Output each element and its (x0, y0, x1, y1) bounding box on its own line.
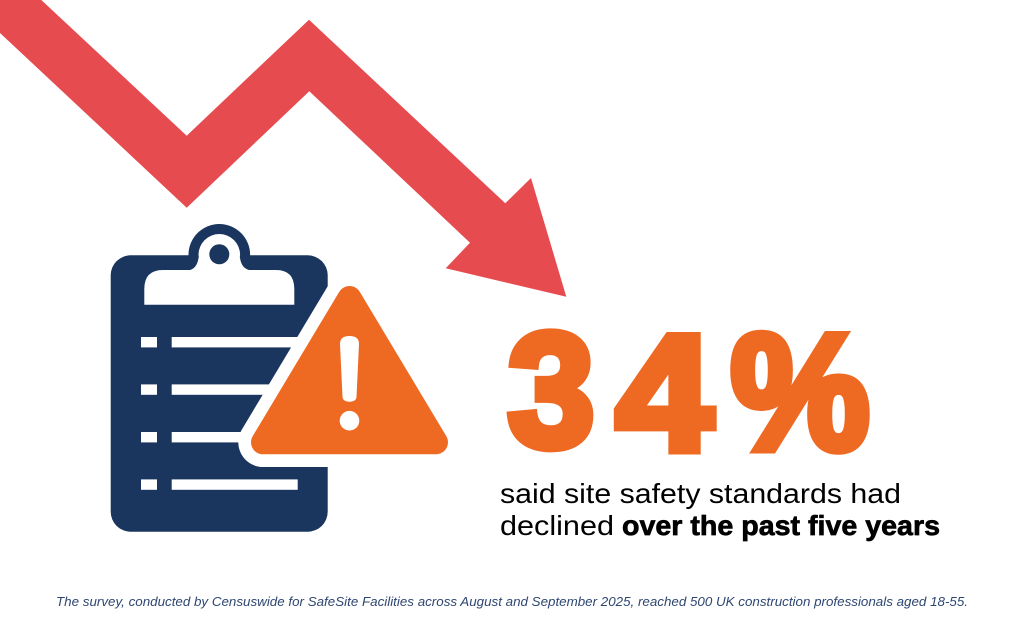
big statistic: 34%: 3 (508, 300, 595, 481)
icon: clipboard board (111, 224, 328, 532)
icon: warning triangle (263, 298, 436, 442)
caption line 2: declined (500, 510, 614, 541)
clipboard checklist rows (141, 337, 298, 490)
caption line 1: said site safety standards had (500, 478, 901, 509)
icon: clipboard with warning triangle (111, 224, 436, 532)
big statistic: 34%: 4 (616, 301, 713, 485)
caption text (500, 478, 940, 541)
caption line 2: over the past five years (622, 510, 940, 541)
footnote: survey source: The survey, conducted by Censuswide for SafeSite Facilities across August and September 2025, reached 500 UK construction professionals aged 18-55. (56, 595, 968, 609)
big statistic: 34%: % (731, 300, 870, 484)
arrow: declining trend (0, 0, 566, 297)
